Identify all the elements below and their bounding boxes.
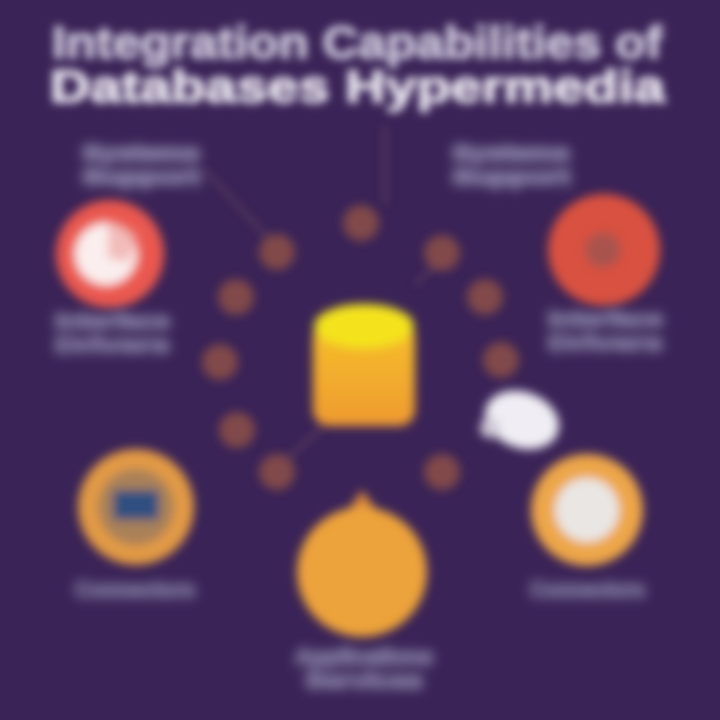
label: right upper: Interface xyxy=(548,308,663,331)
label: top-right: Support xyxy=(452,166,570,189)
label: bottom-left: Connectors xyxy=(75,577,195,602)
label: bottom-centre: Applications xyxy=(295,644,433,669)
icon: top-left red circle xyxy=(56,200,164,308)
label: bottom-right: Connectors xyxy=(530,577,645,602)
label: top-left xyxy=(82,142,200,189)
label: bottom-centre: Services xyxy=(305,668,423,693)
label: top-left: Support xyxy=(82,166,200,189)
icon: bottom-left orange circle xyxy=(78,449,194,565)
label: bottom-centre xyxy=(295,644,433,693)
label: right upper: Drivers xyxy=(548,332,663,355)
label: top-left: Systems xyxy=(82,142,200,165)
label: left upper xyxy=(55,310,170,357)
icon: bottom-right orange circle xyxy=(531,454,643,566)
label: top-right: Systems xyxy=(452,142,570,165)
icon: central database cylinder xyxy=(313,304,415,426)
icon: bottom-centre orange circle xyxy=(297,490,427,637)
node dots: arc around the central database xyxy=(202,205,519,490)
label: left upper: Interface xyxy=(55,310,170,333)
icon: top-right red circle xyxy=(548,194,660,306)
connector lines xyxy=(205,125,445,465)
icon: white speech bubble xyxy=(477,381,567,459)
title xyxy=(50,17,666,112)
label: left upper: Drivers xyxy=(55,334,170,357)
label: top-right xyxy=(452,142,570,189)
title: Integration Capabilities of xyxy=(52,17,663,68)
label: right upper xyxy=(548,308,663,355)
title: Databases Hypermedia xyxy=(50,61,666,112)
